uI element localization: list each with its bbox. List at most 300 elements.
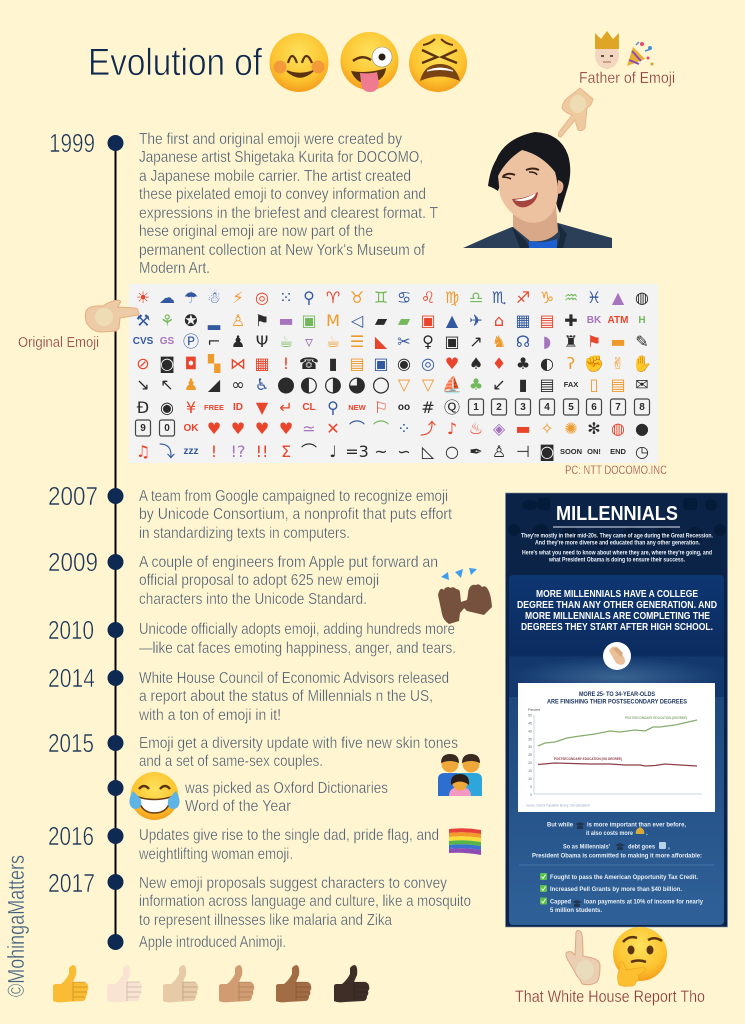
callout: father of emoji: [579, 31, 675, 87]
no-degree series: [538, 763, 697, 766]
row 2: ▂: [207, 310, 221, 330]
row 4: ◎: [421, 354, 435, 372]
header title: MILLENNIALS: [556, 503, 678, 525]
row 4: ♦: [492, 354, 506, 372]
row 7: ✺: [564, 418, 578, 438]
row 4: ▣: [373, 354, 389, 372]
row 3: ♜: [564, 332, 578, 350]
row 5: ▽: [422, 374, 435, 394]
row 5: ◢: [208, 374, 221, 394]
row 5: ▯: [590, 374, 598, 394]
row 8: ~: [374, 442, 388, 460]
row 3: ♞: [492, 332, 506, 350]
2015 entry: and a set of same-sex couples.: [139, 753, 323, 770]
header intro text: [521, 532, 713, 564]
row 2: ⌂: [494, 310, 504, 330]
row 7: ▬: [515, 418, 531, 438]
row 7: ⌒: [349, 418, 365, 438]
panel: original emoji grid: [129, 284, 658, 463]
row 2: ✈: [469, 310, 483, 330]
title: Evolution of: [88, 42, 262, 84]
1999 entry: [49, 128, 438, 277]
row 1: ◍: [635, 288, 649, 306]
row 8: ♫: [136, 442, 150, 460]
row 3: Ⓟ: [183, 332, 199, 350]
row 8: !?: [231, 442, 245, 460]
row 4: ♥: [445, 354, 459, 372]
2009 entry: [48, 547, 438, 608]
2015 entry: [48, 728, 458, 815]
2009 entry: 2009: [48, 547, 98, 577]
degree series: [538, 720, 697, 746]
2017 entry: to represent illnesses like malaria and Zika: [139, 912, 392, 929]
2010 entry: 2010: [48, 615, 94, 645]
row 1: ♐: [516, 288, 530, 306]
row 2: ▣: [301, 310, 317, 330]
1999 entry: hese original emoji are now part of the: [139, 223, 373, 240]
credit: photo credit: PC: NTT DOCOMO.INC: [565, 465, 667, 477]
panel body text: .: [646, 830, 648, 837]
row 2: ✚: [564, 310, 578, 330]
row 4: ◐: [540, 354, 554, 372]
2015 entry: Word of the Year: [185, 798, 292, 815]
1999 entry: Japanese artist Shigetaka Kurita for DOCOMO,: [139, 149, 423, 166]
row 2: ▲: [446, 310, 459, 330]
row 5: ↙: [492, 374, 506, 394]
row 2: BK: [587, 314, 602, 326]
row 6: oo: [398, 402, 410, 412]
row 7: ♥: [231, 418, 245, 438]
row 3: ✎: [635, 332, 649, 350]
label: father of emoji: Father of Emoji: [579, 70, 675, 87]
2014 entry: with a ton of emoji in it!: [138, 707, 281, 724]
icon: pointing right hand: [85, 300, 139, 332]
row 5: ♟: [184, 374, 198, 394]
header silhouettes: [508, 498, 726, 548]
line chart: POSTSECONDARY EDUCATION (DEGREE): [625, 716, 687, 720]
row 1: ☃: [207, 288, 221, 306]
row 1: ♓: [587, 288, 601, 306]
row 8: ◷: [635, 442, 649, 460]
panel body text: Increased Pell Grants by more than $40 billion.: [550, 886, 682, 893]
row 6: ⚲: [327, 398, 339, 416]
row 4: ◙: [159, 354, 175, 372]
row 8: ⊣: [516, 442, 530, 460]
1999 entry: permanent collection at New York's Museum of: [139, 242, 425, 259]
row 5: ⛵: [442, 374, 462, 394]
number key outlines: [136, 399, 650, 436]
2014 entry: [48, 663, 449, 724]
line chart: 45: [528, 722, 532, 726]
1999 entry: these pixelated emoji to convey information and: [139, 186, 426, 203]
row 3: ☊: [516, 332, 530, 350]
row 6: ID: [233, 402, 243, 412]
row 8: ◙: [539, 442, 555, 460]
row 8: ⌒: [301, 442, 317, 460]
icon: raised brown hands: [438, 568, 492, 624]
2016 entry: weightlifting woman emoji.: [138, 846, 293, 863]
header intro text: And they're more diverse and educated than any other generation.: [535, 540, 700, 546]
row 7: ♥: [255, 418, 269, 438]
row 6: 2: [496, 402, 502, 412]
row 3: ☕: [279, 332, 293, 350]
2014 entry: White House Council of Economic Advisors released: [139, 670, 449, 687]
1999 entry: 1999: [49, 128, 95, 158]
2016 entry: Updates give rise to the single dad, pride flag, and: [139, 827, 439, 844]
row 4: ◉: [397, 354, 411, 372]
row 8: ∽: [397, 442, 411, 460]
row 6: 4: [544, 402, 550, 412]
row 1: ♋: [397, 288, 411, 306]
row 6: NEW: [348, 402, 367, 412]
line chart: 30: [528, 745, 532, 749]
row 7: ♥: [207, 418, 221, 438]
row 7: ◍: [611, 418, 625, 438]
row 4: ✋: [632, 354, 652, 372]
row 6: #: [421, 398, 435, 416]
row 7: 9: [140, 422, 146, 434]
row 3: ☕: [326, 332, 340, 350]
2017 entry: [48, 868, 471, 951]
row 7: ⁘: [397, 418, 411, 438]
2007 entry: [48, 481, 452, 542]
row 2: ✪: [184, 310, 198, 330]
row 7: ●: [635, 418, 649, 438]
row 5: ↘: [136, 374, 150, 394]
2017 entry: Apple introduced Animoji.: [139, 934, 286, 951]
1999 entry: expressions in the briefest and clearest format. T: [139, 205, 438, 222]
icon: crowned man: [595, 31, 619, 69]
label: white house report: That White House Report Tho: [515, 987, 705, 1006]
row 4: ⊘: [136, 354, 150, 372]
row 8: ♙: [492, 442, 506, 460]
row 1: ⚲: [303, 288, 315, 306]
row 5: ▤: [539, 374, 555, 394]
row 4: !: [283, 354, 289, 372]
line chart: POSTSECONDARY EDUCATION (NO DEGREE): [554, 757, 622, 761]
icon: clapping hands: [603, 642, 631, 670]
row 1: ♊: [374, 288, 388, 306]
row 8: ○: [445, 442, 459, 460]
icons: thumbs up skin tones: [53, 965, 369, 1002]
row 6: ⚐: [374, 398, 388, 416]
row 7: ≃: [302, 418, 316, 438]
line chart: Source: Current Population Survey, CEA calculations: [526, 804, 590, 808]
panel body text: But while: [547, 822, 573, 828]
row 1: ♒: [564, 288, 578, 306]
row 6: 8: [639, 402, 645, 412]
2010 entry: —like cat faces emoting happiness, anger, and tears.: [139, 640, 456, 657]
panel body text: Fought to pass the American Opportunity Tax Credit.: [550, 874, 698, 881]
row 3: ⌐: [207, 332, 221, 350]
2016 entry: [48, 821, 439, 863]
row 3: ↗: [469, 332, 483, 350]
icon: party popper: [627, 42, 654, 66]
row 4: ▮: [329, 354, 337, 372]
row 7: ◈: [493, 418, 506, 438]
row 6: 5: [568, 402, 574, 412]
row 2: ▬: [278, 310, 294, 330]
row 3: ☰: [350, 332, 364, 350]
line chart: ARE FINISHING THEIR POSTSECONDARY DEGREES: [547, 698, 687, 706]
2017 entry: information across language and culture, like a mosquito: [139, 893, 471, 910]
row 5: ◐: [300, 372, 318, 396]
row 5: ◕: [348, 372, 366, 396]
row 3: CVS: [133, 336, 154, 346]
2009 entry: A couple of engineers from Apple put forward an: [139, 554, 438, 571]
row 7: ⤴: [420, 418, 436, 438]
line chart: 25: [528, 753, 532, 757]
line chart: MORE 25- TO 34-YEAR-OLDS: [579, 691, 655, 698]
row 8: Σ: [281, 442, 291, 460]
row 6: ¥: [186, 398, 196, 416]
row 4: ▦: [254, 354, 270, 372]
row 6: 3: [520, 402, 526, 412]
row 4: ▚: [207, 354, 221, 372]
row 1: ♑: [540, 288, 554, 306]
row 8: =3: [345, 442, 369, 460]
line chart: 50: [528, 714, 532, 718]
row 8: END: [610, 446, 626, 456]
row 5: ✉: [635, 374, 649, 394]
row 4: ▤: [349, 354, 365, 372]
row 7: ♪: [447, 418, 457, 438]
row 1: ☂: [184, 288, 198, 306]
row 5: ↖: [160, 374, 174, 394]
2007 entry: in standardizing texts in computers.: [139, 525, 350, 542]
timeline axis: [114, 143, 116, 942]
line chart: 15: [528, 769, 532, 773]
row 5: ▮: [519, 374, 527, 394]
row 1: ☁: [159, 288, 175, 306]
row 3: ▬: [610, 332, 626, 350]
row 1: ♈: [326, 288, 340, 306]
row 8: zzz: [184, 446, 198, 456]
row 1: ⁙: [279, 288, 293, 306]
panel heading: DEGREE THAN ANY OTHER GENERATION. AND: [517, 600, 717, 611]
row 8: ✒: [469, 442, 483, 460]
2007 entry: A team from Google campaigned to recognize emoji: [139, 488, 448, 505]
row 2: ▤: [539, 310, 555, 330]
row 1: ☀: [136, 288, 150, 306]
icon: tired face emoji: [409, 34, 467, 92]
row 1: ◎: [255, 288, 269, 306]
icon: family emoji: [438, 754, 482, 796]
row 3: ▿: [305, 332, 313, 350]
row 6: 6: [591, 402, 597, 412]
row 6: ▼: [256, 398, 269, 416]
row 1: ♍: [445, 288, 459, 306]
row 7: OK: [184, 422, 199, 434]
row 6: 1: [473, 402, 479, 412]
2014 entry: a report about the status of Millennials n the US,: [139, 688, 433, 705]
icon: face with tears of joy: [129, 772, 180, 820]
icon: pointing up hand: [566, 930, 600, 985]
row 4: ʔ: [567, 354, 575, 372]
panel: White House millennials report: [506, 493, 728, 927]
row 5: ▽: [398, 374, 411, 394]
row 2: H: [638, 314, 646, 326]
row 4: ⋈: [230, 354, 246, 372]
2015 entry: Emoji get a diversity update with five new skin tones: [139, 735, 458, 752]
line chart: Percent: [528, 708, 540, 712]
face: [498, 150, 558, 223]
row 8: !: [211, 442, 217, 460]
2014 entry: 2014: [48, 663, 95, 693]
row 3: ▣: [444, 332, 460, 350]
row 7: ✧: [540, 418, 554, 438]
icon: smiling face emoji: [270, 33, 328, 92]
hair back: [488, 132, 570, 213]
line chart: 10: [528, 777, 532, 781]
icon: winking tongue emoji: [340, 32, 398, 92]
row 7: 0: [164, 422, 170, 434]
panel body text: [532, 822, 703, 914]
row 1: ♉: [350, 288, 364, 306]
panel body text: loan payments at 10% of income for nearly: [584, 898, 703, 906]
photo: Shigetaka Kurita: [463, 132, 612, 248]
panel body text: is more important than ever before,: [587, 822, 686, 828]
row 5: ○: [372, 372, 390, 396]
row 4: ◘: [185, 354, 197, 372]
2007 entry: by Unicode Consortium, a nonprofit that puts effort: [139, 506, 452, 523]
panel body text: Capped: [550, 898, 571, 906]
row 7: ✻: [587, 418, 601, 438]
row 6: ◉: [160, 398, 174, 416]
row 4: ✊: [584, 354, 604, 372]
line chart: 20: [528, 761, 532, 765]
credit: MohingaMatters: ©MohingaMatters: [3, 855, 29, 997]
line chart: 5: [530, 785, 532, 789]
icon: pride flag: [449, 828, 481, 855]
panel body text: President Obama is committed to making it more affordable:: [532, 852, 702, 860]
row 3: ◗: [543, 332, 551, 350]
shirt: [529, 239, 557, 248]
row 6: ↵: [279, 398, 293, 416]
2017 entry: 2017: [48, 868, 95, 898]
panel body text: debt goes: [628, 844, 655, 850]
row 1: ♌: [421, 288, 435, 306]
panel heading: [517, 589, 717, 633]
inner panel: [509, 575, 724, 925]
2015 entry: 2015: [48, 728, 94, 758]
row 7: ♨: [469, 418, 483, 438]
panel body text: ,: [668, 844, 670, 850]
row 7: ✕: [326, 418, 340, 438]
row 4: ✌: [611, 354, 625, 372]
row 3: ✂: [397, 332, 411, 350]
row 6: 7: [615, 402, 621, 412]
row 8: ◺: [422, 442, 435, 460]
line chart: 35: [528, 738, 532, 742]
row 5: ∞: [231, 374, 245, 394]
row 3: ♀: [422, 332, 434, 350]
row 8: SOON: [560, 446, 582, 456]
row 2: ◁: [350, 310, 364, 330]
row 1: ♏: [492, 288, 506, 306]
row 4: ♠: [469, 354, 483, 372]
row 5: ♣: [469, 374, 483, 394]
row 1: ♎: [469, 288, 483, 306]
1999 entry: Modern Art.: [139, 260, 210, 277]
1999 entry: a Japanese mobile carrier. The artist created: [139, 168, 411, 185]
row 2: ⚒: [136, 310, 150, 330]
row 3: ⚑: [587, 332, 601, 350]
row 1: ⚡: [232, 288, 244, 306]
row 8: ♩: [329, 442, 337, 460]
row 3: Ψ: [256, 332, 268, 350]
row 5: ◑: [324, 372, 342, 396]
panel heading: MORE MILLENNIALS ARE COMPLETING THE: [525, 611, 710, 622]
jacket: [463, 223, 612, 248]
panel heading: DEGREES THEY START AFTER HIGH SCHOOL.: [521, 622, 713, 633]
row 8: ON!: [587, 446, 601, 456]
line chart: [518, 683, 715, 812]
panel body text: it also costs more: [586, 830, 633, 837]
row 3: ♟: [231, 332, 245, 350]
row 2: ♙: [231, 310, 245, 330]
row 5: FAX: [564, 380, 578, 388]
row 3: ◣: [375, 332, 388, 350]
row 2: ATM: [608, 314, 628, 326]
icon: thinking face: [613, 927, 667, 986]
2007 entry: 2007: [48, 481, 98, 511]
row 6: CL: [302, 402, 316, 412]
1999 entry: The first and original emoji were created by: [139, 131, 402, 148]
2010 entry: [48, 615, 456, 657]
row 4: ☎: [299, 354, 319, 372]
panel body text: So as Millennials': [563, 844, 610, 850]
timeline: [108, 135, 124, 950]
row 7: ♥: [279, 418, 293, 438]
row 8: ⤵: [159, 442, 175, 460]
row 2: ▦: [515, 310, 531, 330]
icon: pointing down hand: [558, 88, 593, 137]
2009 entry: official proposal to adopt 625 new emoji: [139, 572, 379, 589]
row 6: FREE: [204, 402, 224, 412]
row 3: GS: [160, 336, 175, 346]
panel body text: 5 million students.: [550, 907, 602, 914]
row 5: ▤: [610, 374, 626, 394]
row 2: ▣: [420, 310, 436, 330]
line chart: 40: [528, 730, 532, 734]
inline icons: [540, 822, 666, 907]
band behind clap icon: [509, 657, 724, 697]
row 5: ♿: [255, 374, 269, 394]
row 1: ▲: [612, 288, 625, 306]
line chart: 0: [530, 793, 532, 797]
2009 entry: characters into the Unicode Standard.: [139, 591, 367, 608]
row 7: ⌒: [373, 418, 389, 438]
2017 entry: New emoji proposals suggest characters to convey: [139, 875, 447, 892]
2010 entry: Unicode officially adopts emoji, adding hundreds more: [139, 621, 455, 638]
row 2: ⚑: [255, 310, 269, 330]
label: original emoji: Original Emoji: [18, 334, 99, 351]
header intro text: what President Obama is doing to ensure their success.: [548, 556, 685, 564]
row 6: Ⓠ: [444, 398, 460, 416]
2016 entry: 2016: [48, 821, 94, 851]
row 2: ▰: [375, 310, 388, 330]
panel heading: MORE MILLENNIALS HAVE A COLLEGE: [536, 589, 698, 600]
row 5: ●: [277, 372, 295, 396]
neck: [513, 205, 558, 241]
row 6: Ɖ: [137, 398, 149, 416]
row 2: M: [326, 310, 340, 330]
row 8: !!: [256, 442, 268, 460]
row 2: ⚘: [160, 310, 174, 330]
row 4: ♣: [516, 354, 530, 372]
row 2: ▰: [398, 310, 411, 330]
